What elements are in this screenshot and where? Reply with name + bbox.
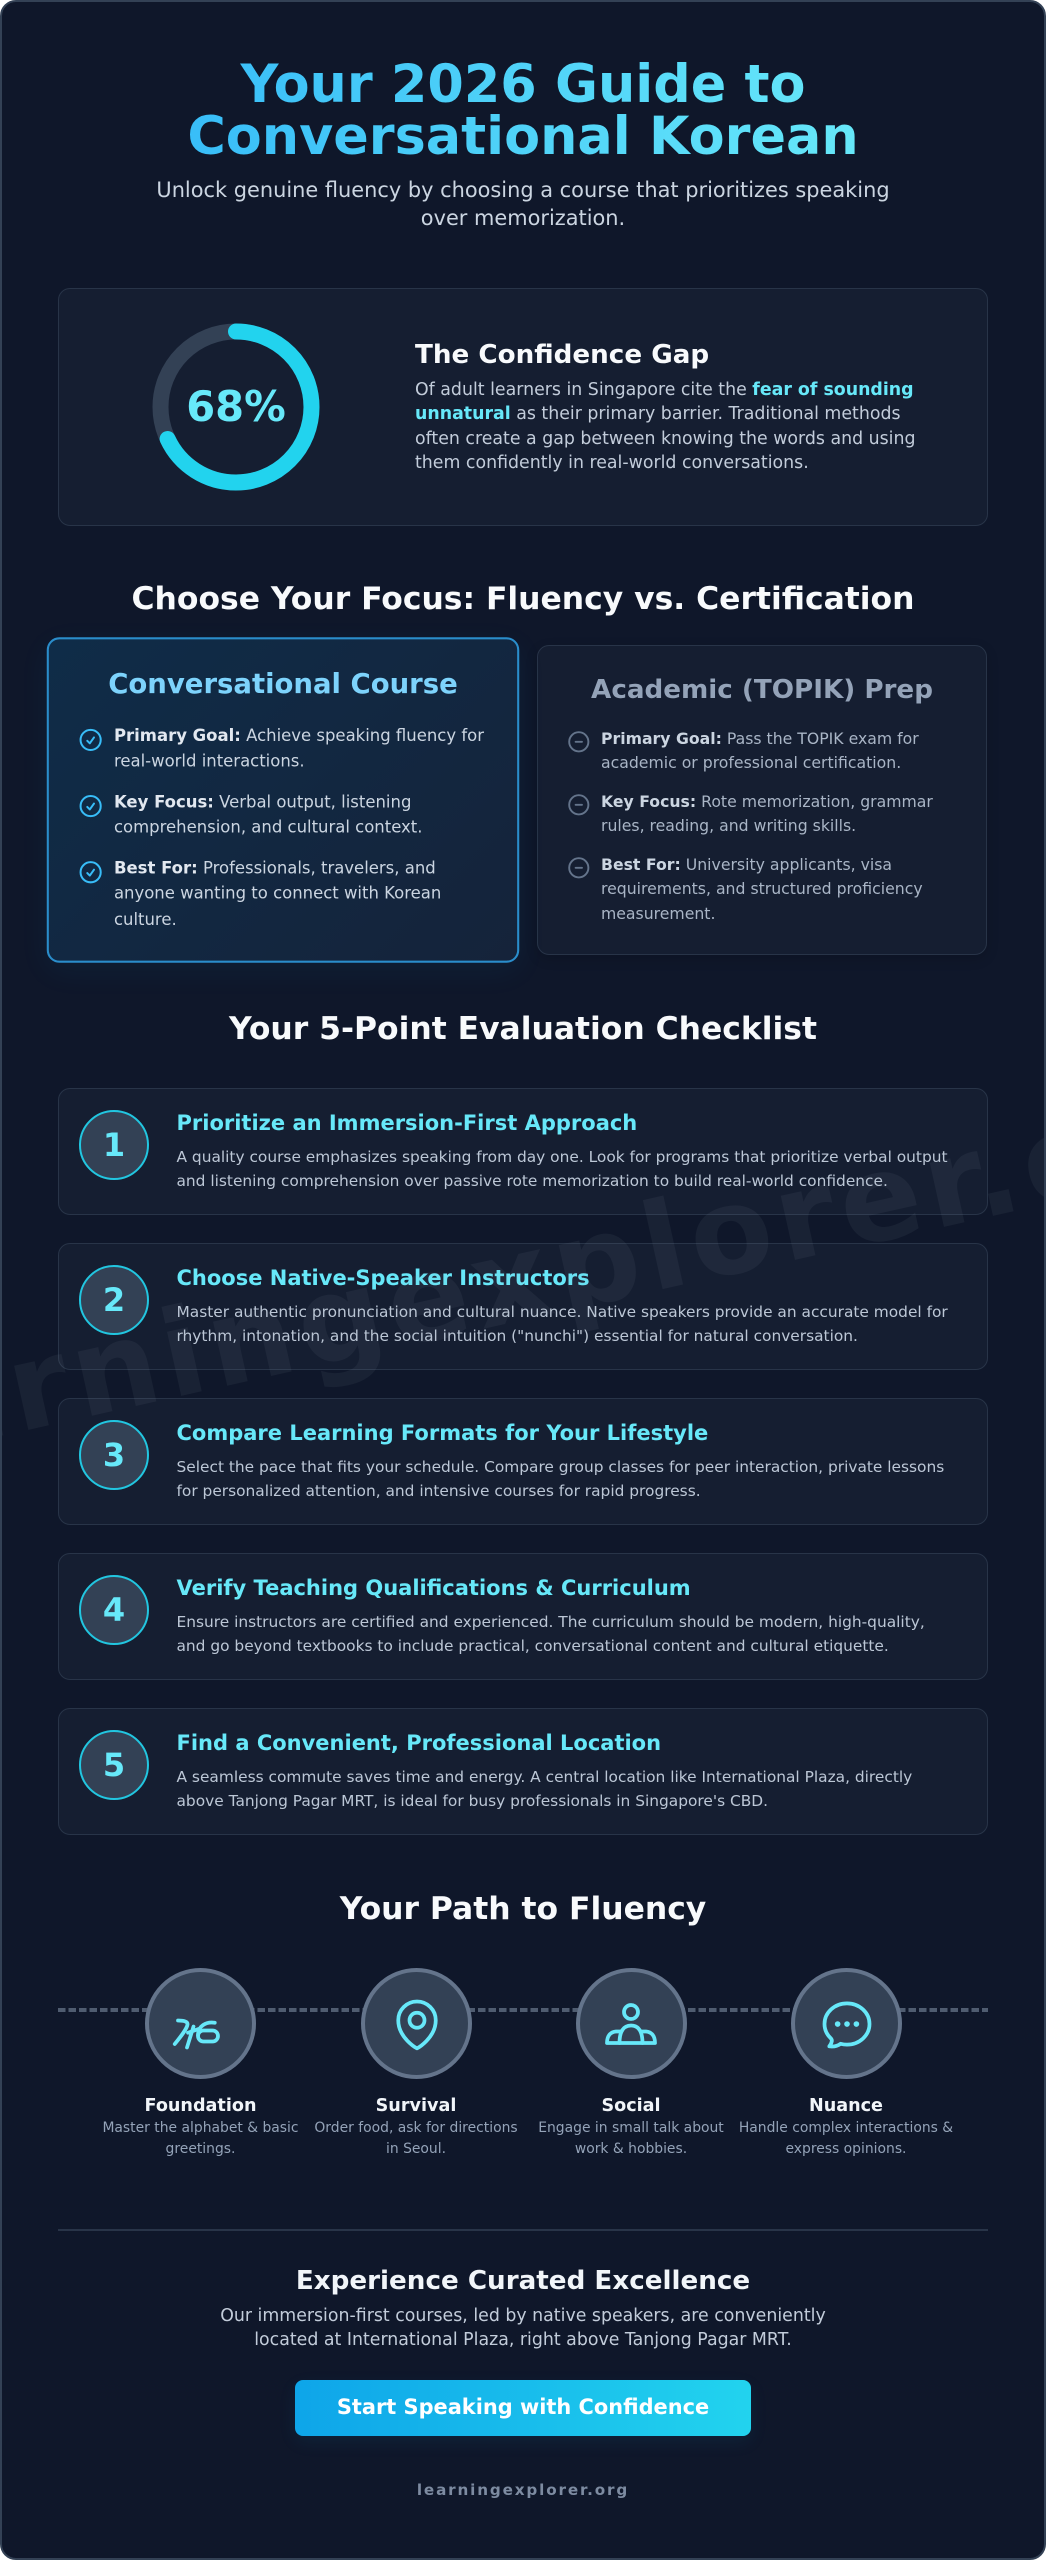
icon: check [80,795,102,818]
number 3: 3 [103,1436,125,1474]
number 2: 2 [103,1281,125,1319]
step description: Handle complex interactions & [739,2120,953,2136]
heading: checklist: Your 5-Point Evaluation Checklist [229,1011,817,1047]
card title: Academic (TOPIK) Prep [591,675,933,705]
icon: check [80,861,102,884]
icon: people [605,2003,657,2045]
heading: choose your focus: Choose Your Focus: Fluency vs. Certification [132,581,914,617]
step label: Foundation [145,2096,256,2116]
card title: Conversational Course [108,669,458,700]
subtitle: over memorization. [421,206,625,230]
item: best for: requirements, and structured proficiency [601,879,923,898]
item description: A quality course emphasizes speaking from day one. Look for programs that prioritize verbal output [176,1148,948,1166]
item: key focus [114,792,422,837]
button: start speaking: Start Speaking with Confidence [337,2395,709,2419]
item description [176,1148,948,1190]
panel: checklist item 1 [58,1088,988,1215]
text: confidence gap body [415,380,916,473]
item: best for [114,858,441,929]
text: cta paragraph [220,2306,826,2350]
number 3 [79,1420,149,1490]
step description [739,2120,953,2157]
icon: minus [568,731,590,752]
title [183,58,863,162]
item: best for [601,855,923,923]
number 5: 5 [103,1746,125,1784]
step description [538,2120,724,2157]
step description [102,2120,299,2157]
step label: Survival [376,2096,456,2116]
panel: conversational course [47,637,519,963]
item: key focus: comprehension, and cultural context. [114,817,422,837]
step circle: social [576,1968,686,2079]
footer url: learningexplorer.org [417,2481,629,2499]
icon: check [80,728,102,751]
step description: express opinions. [786,2141,906,2157]
item description: Ensure instructors are certified and experienced. The curriculum should be modern, high-quality, [176,1613,925,1631]
icon: minus [568,857,590,878]
icon: chat bubble [822,2002,872,2048]
item: primary goal: real-world interactions. [114,751,305,771]
item title: Verify Teaching Qualifications & Curriculum [176,1576,691,1600]
item: best for: Best For: Professionals, travelers, and [114,858,436,878]
item description [176,1768,912,1810]
step description: work & hobbies. [575,2141,687,2157]
step description: Engage in small talk about [538,2120,724,2136]
step circle: nuance [791,1968,902,2079]
number 5 [79,1730,149,1800]
item description: Master authentic pronunciation and cultural nuance. Native speakers provide an accurate model for [176,1303,948,1321]
item: primary goal: academic or professional certification. [601,753,901,772]
item: key focus: Key Focus: Rote memorization, grammar [601,792,933,811]
number 1 [79,1110,149,1180]
panel: checklist item 2 [58,1243,988,1370]
item: key focus: rules, reading, and writing skills. [601,816,856,835]
item: best for: anyone wanting to connect with Korean [114,883,441,903]
text: confidence gap body: often create a gap between knowing the words and using [415,429,916,449]
button: start speaking [295,2380,751,2436]
item: primary goal: Primary Goal: Achieve speaking fluency for [114,725,484,745]
number 1: 1 [103,1126,125,1164]
text: cta paragraph: located at International Plaza, right above Tanjong Pagar MRT. [254,2330,792,2350]
panel: checklist item 5 [58,1708,988,1835]
text: confidence gap body: Of adult learners in Singapore cite the fear of sounding [415,380,914,400]
item title: Choose Native-Speaker Instructors [176,1266,590,1290]
text: confidence gap body: unnatural as their primary barrier. Traditional methods [415,404,901,424]
panel: academic prep [537,645,987,955]
item: primary goal [114,725,484,771]
step description: greetings. [166,2141,235,2157]
title: Your 2026 Guide to [240,54,806,114]
item description: and go beyond textbooks to include practical, conversational content and cultural etiquette. [176,1637,889,1655]
item: key focus [601,792,933,835]
panel: checklist item 3 [58,1398,988,1525]
item title: Prioritize an Immersion-First Approach [176,1111,637,1135]
item description: rhythm, intonation, and the social intuition ("nunchi") essential for natural conversation. [176,1327,858,1345]
step label: Nuance [809,2096,883,2116]
heading: the confidence gap: The Confidence Gap [415,340,709,370]
icon: minus [568,794,590,816]
heading: path to fluency: Your Path to Fluency [340,1891,706,1927]
item description [176,1303,948,1345]
text: confidence gap body: them confidently in real-world conversations. [415,453,809,473]
subtitle: Unlock genuine fluency by choosing a course that prioritizes speaking [156,178,890,202]
item description: A seamless commute saves time and energy. A central location like International Plaza, directly [176,1768,912,1786]
item: best for: Best For: University applicants, visa [601,855,892,874]
number 2 [79,1265,149,1335]
item: best for: culture. [114,909,177,929]
item: best for: measurement. [601,904,715,923]
step label: Social [601,2096,661,2116]
chart: 68% ring [152,324,320,490]
item title: Compare Learning Formats for Your Lifestyle [176,1421,708,1445]
item: key focus: Key Focus: Verbal output, listening [114,792,411,812]
item description: above Tanjong Pagar MRT, is ideal for busy professionals in Singapore's CBD. [176,1792,768,1810]
icon: map pin [396,2000,438,2050]
step circle: foundation [145,1968,256,2079]
number 4: 4 [103,1591,125,1629]
heading: experience curated excellence: Experience Curated Excellence [296,2266,750,2296]
title: Conversational Korean [187,106,859,166]
step description [314,2120,518,2157]
icon: alphabet [172,2018,220,2050]
item description: and listening comprehension over passive rote memorization to build real-world confidence. [176,1172,888,1190]
item description: Select the pace that fits your schedule. Compare group classes for peer interaction, private lessons [176,1458,944,1476]
item: primary goal: Primary Goal: Pass the TOPIK exam for [601,729,919,748]
number 4 [79,1575,149,1645]
step circle: survival [361,1968,472,2079]
text: cta paragraph: Our immersion-first courses, led by native speakers, are conveniently [220,2306,826,2326]
panel: checklist item 4 [58,1553,988,1680]
timeline dashed line [58,2008,988,2012]
item title: Find a Convenient, Professional Location [176,1731,661,1755]
step description: Master the alphabet & basic [102,2120,299,2136]
ring value: 68% [186,382,286,431]
item description [176,1458,944,1500]
panel: confidence gap [58,288,988,526]
subtitle [156,178,890,230]
item description: for personalized attention, and intensive courses for rapid progress. [176,1482,701,1500]
item description [176,1613,925,1655]
step description: Order food, ask for directions [314,2120,518,2136]
item: primary goal [601,729,919,772]
step description: in Seoul. [386,2141,446,2157]
